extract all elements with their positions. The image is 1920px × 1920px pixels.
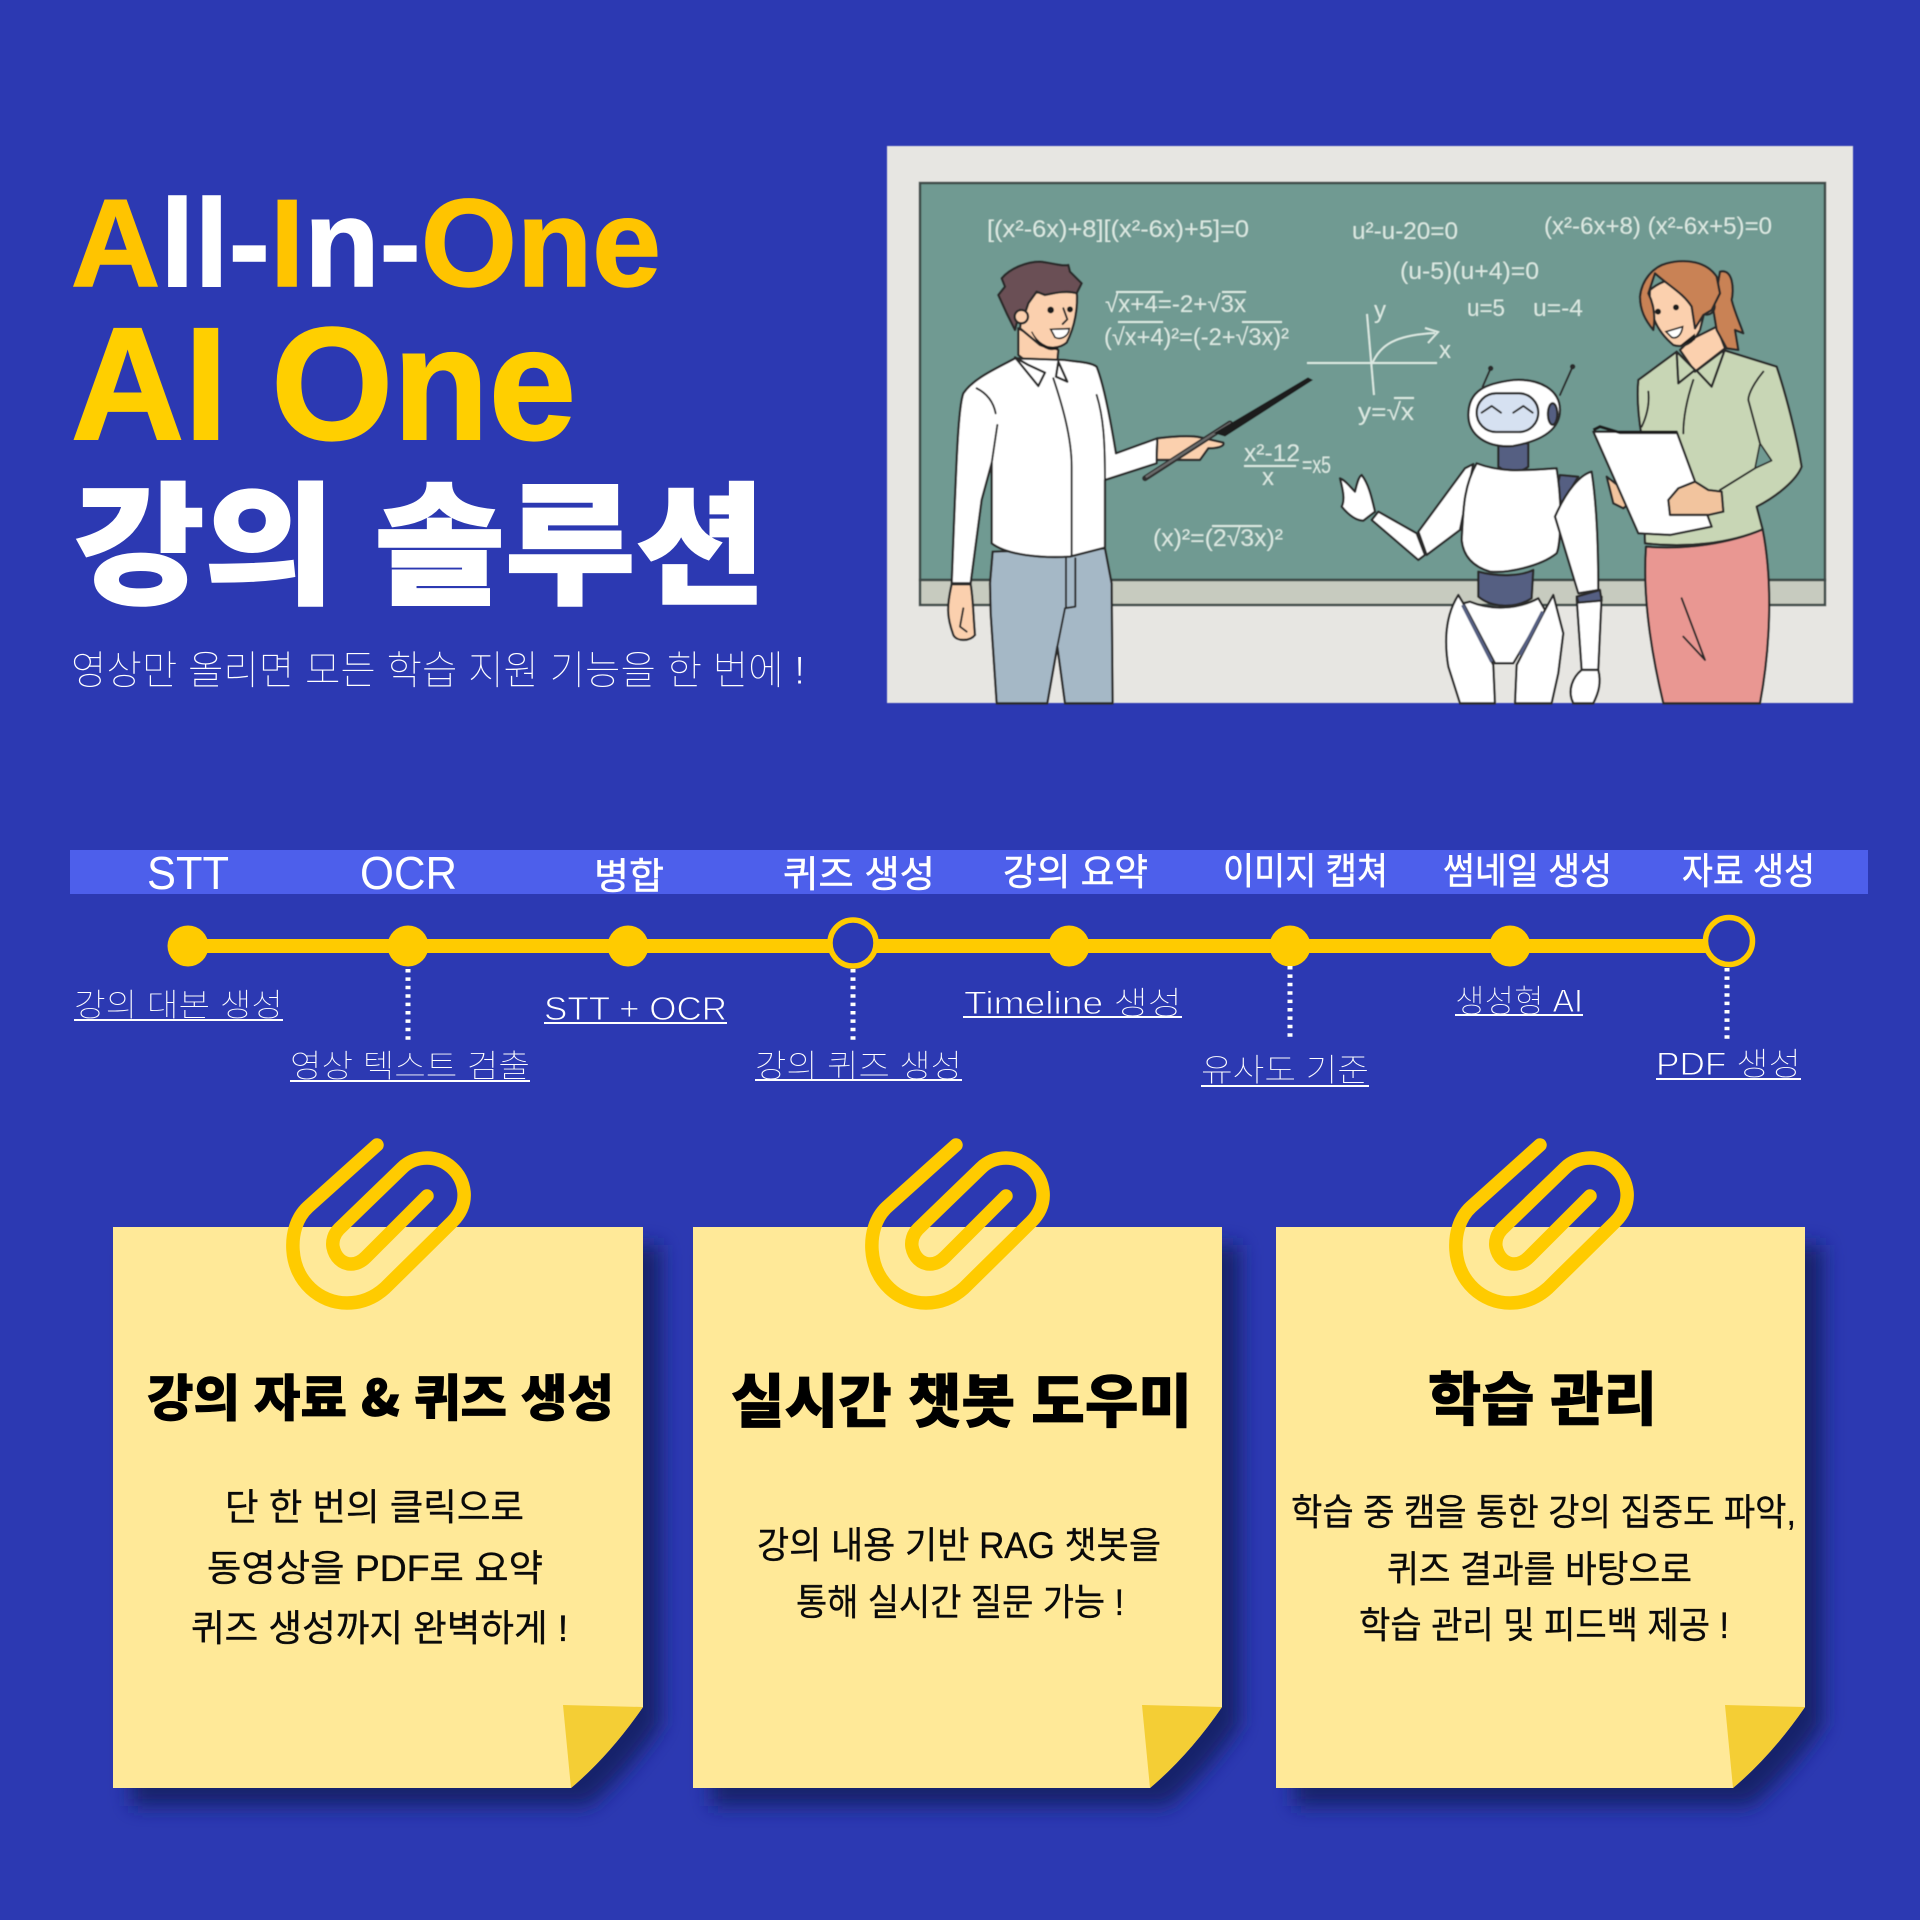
timeline header labels: 썸네일 생성 (1443, 851, 1612, 892)
timeline sub-labels: 강의 대본 생성 (74, 987, 283, 1023)
timeline sub-labels: 생성형 AI (1455, 983, 1583, 1019)
card body (1291, 1492, 1796, 1646)
chalk formulas: y=√x (1358, 399, 1414, 426)
timeline header bar (70, 850, 1868, 894)
card body (757, 1525, 1161, 1623)
title line: AI One: AI One (71, 294, 576, 473)
panel: 실시간 챗봇 도우미 (693, 1145, 1240, 1806)
timeline sub-labels (74, 983, 1801, 1088)
folded corner (563, 1705, 643, 1788)
timeline header labels: 자료 생성 (1682, 851, 1815, 892)
panel: 학습 관리 (1276, 1145, 1823, 1806)
card body: 동영상을 PDF로 요약 (207, 1548, 543, 1589)
timeline header labels: 이미지 캡쳐 (1223, 851, 1388, 892)
timeline header labels: 병합 (594, 856, 664, 897)
card shadow (711, 1245, 1240, 1806)
timeline sub-labels: 강의 퀴즈 생성 (755, 1048, 962, 1084)
timeline sub-labels: PDF 생성 (1656, 1046, 1801, 1082)
panel: 강의 자료 & 퀴즈 생성 (113, 1145, 661, 1806)
timeline sub-labels: 영상 텍스트 검출 (290, 1048, 530, 1084)
chalk tray (920, 580, 1825, 605)
chalk formulas: (u-5)(u+4)=0 (1400, 258, 1539, 285)
folded corner (1725, 1705, 1805, 1788)
icon: paperclip (293, 1145, 464, 1303)
student woman with notebook (1593, 261, 1802, 703)
card heading: 학습 관리 (1428, 1368, 1657, 1433)
timeline sub-labels: STT + OCR (544, 990, 727, 1027)
timeline sub-labels: 유사도 기준 (1201, 1052, 1369, 1088)
chalk formulas: x (1262, 464, 1274, 491)
card body: 학습 관리 및 피드백 제공 ! (1359, 1605, 1729, 1646)
sticky note (113, 1227, 643, 1788)
icon: paperclip (872, 1145, 1043, 1303)
illustration background (887, 146, 1853, 703)
card shadow (131, 1245, 661, 1806)
card body: 퀴즈 결과를 바탕으로 (1387, 1549, 1692, 1590)
pointer stick (1215, 378, 1312, 436)
card body (191, 1487, 568, 1649)
chalkboard (920, 183, 1825, 580)
title line: 강의 솔루션: 강의 솔루션 (74, 474, 766, 621)
robot (1340, 364, 1602, 703)
card heading: 강의 자료 & 퀴즈 생성 (147, 1359, 614, 1431)
subtitle: 영상만 올리면 모든 학습 지원 기능을 한 번에 ! (71, 649, 805, 693)
timeline header labels: 퀴즈 생성 (783, 854, 935, 895)
title line: All-In-One: All-In-One (71, 175, 661, 313)
chalk formulas: (x²-6x+8) (x²-6x+5)=0 (1544, 213, 1772, 240)
icon: paperclip (1456, 1145, 1627, 1303)
chalk formulas: u²-u-20=0 (1352, 218, 1458, 245)
timeline line and nodes (168, 918, 1752, 966)
chalk formulas: √x+4=-2+√3x (1105, 291, 1246, 318)
illustration: classroom with teacher, robot and student (887, 146, 1853, 703)
card body: 통해 실시간 질문 가능 ! (796, 1582, 1124, 1623)
card body: 강의 내용 기반 RAG 챗봇을 (757, 1525, 1161, 1566)
chalk formulas: x²-12 (1244, 440, 1300, 467)
chalk formulas: =x5 (1302, 452, 1331, 479)
title (71, 175, 766, 621)
card body: 퀴즈 생성까지 완벽하게 ! (191, 1608, 568, 1649)
chalk formulas: x (1439, 337, 1451, 364)
chalk formulas: u=5 (1467, 295, 1505, 322)
chalk formulas: u=-4 (1533, 295, 1583, 322)
timeline header labels: 강의 요약 (1003, 852, 1148, 893)
folded corner (1142, 1705, 1222, 1788)
card heading: 실시간 챗봇 도우미 (731, 1370, 1192, 1435)
chalk formulas: y (1374, 297, 1386, 324)
timeline header labels: STT (147, 847, 229, 899)
chalk formulas: (√x+4)²=(-2+√3x)² (1104, 324, 1289, 351)
chalk formulas (987, 213, 1772, 552)
card body: 단 한 번의 클릭으로 (225, 1487, 524, 1528)
chalk formulas: [(x²-6x)+8][(x²-6x)+5]=0 (987, 216, 1249, 243)
timeline sub-labels: Timeline 생성 (964, 985, 1182, 1021)
card shadow (1294, 1245, 1823, 1806)
timeline header labels (147, 847, 1815, 899)
chalk formulas: (x)²=(2√3x)² (1153, 525, 1283, 552)
sticky note (1276, 1227, 1805, 1788)
timeline header labels: OCR (360, 847, 457, 899)
card body: 학습 중 캠을 통한 강의 집중도 파악, (1291, 1492, 1796, 1533)
dotted connectors (408, 966, 1727, 1040)
sticky note (693, 1227, 1222, 1788)
teacher man with pointer (948, 262, 1230, 703)
